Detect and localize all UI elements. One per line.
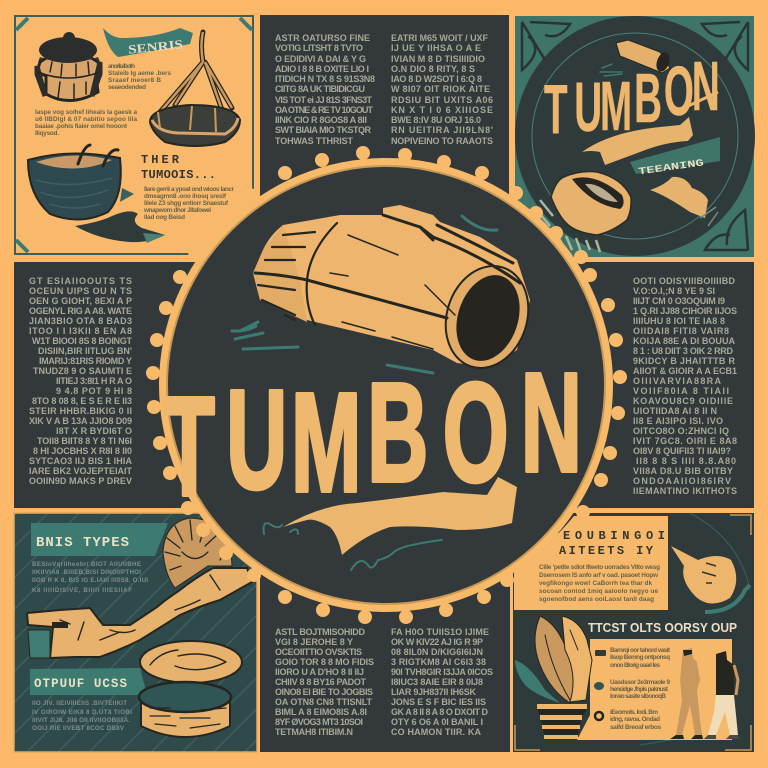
panel: middle right text: IIIJT CM 0 O3OQUIM I9: [633, 296, 725, 306]
icon: potted leaf plant: [515, 616, 592, 739]
label: Otpuuf Ucss: [30, 668, 147, 695]
panel: middle right text: V.O:O.I,;N 8 YE 9 SI: [633, 286, 715, 296]
text: senris note: [108, 63, 171, 91]
panel: middle left text: XIK V A B 13A JJIO8 D09: [29, 416, 132, 426]
panel: bottom left types: [14, 513, 257, 752]
callout: Housing heading box: sgoenofbod aens ooiLaosi tanll daag: [539, 596, 654, 603]
panel: middle left text: ITOO I I I3KII 8 EN A8: [29, 326, 132, 336]
text: vessel note: Iaspe vog solhef Iiheals Ia gaesk a: [35, 109, 137, 116]
label: Bnis Types: BNIS TYPES: [36, 535, 129, 551]
text: legend three: iEeornoIs. Iodi. Bm: [610, 709, 658, 716]
icon: leather piece: [650, 177, 718, 226]
panel: middle left text: W1T BIOOI 8S 8 BOINGT: [32, 336, 132, 346]
panel: middle left text: SYTCAO3 IIJ BIS 1 IHIA: [29, 456, 132, 466]
panel: bottom centre text: I8IUC3 8AIE EIR 8 0IJ8: [391, 677, 483, 687]
panel: middle left text: TNUDZ8 9 O SAUMTI E: [33, 366, 132, 376]
panel: top centre text: VOTIG LITSHT 8 TVTO: [275, 43, 363, 53]
text: legend two: Uasdssor 3e3rmaole 9: [610, 679, 670, 686]
text: types note: K8 IIIIIDISIVE, BIIIII IIIESIIAF: [32, 587, 132, 594]
text: uses note: [32, 700, 132, 732]
text: legend three: idng, ravoa. Ondad: [610, 716, 660, 723]
panel: middle left text: IITIEJ 3:8I1 H R A O: [56, 376, 132, 386]
panel: bottom centre text: BIML A 8 EIMO8IS A.8I: [275, 707, 367, 717]
panel: bottom centre text: 8YF ØVOG3 MT3 10SOI: [275, 717, 363, 727]
panel: middle right text: VOIIF80IA 8 TIAII: [633, 386, 729, 396]
panel: bottom centre text: IIORO U A D'HO 8 II IIJ: [275, 667, 364, 677]
panel: middle right text: II8 E AI3IPO ISI. IVO: [633, 416, 723, 426]
panel: bottom centre text: GOIO TOR 8 8 MO FIDIS: [275, 657, 374, 667]
title: Tumbon: TUMBON: [163, 344, 582, 525]
panel: bottom right: [513, 513, 754, 752]
panel: middle right text: [510, 262, 754, 508]
panel: middle right text: ONDOAAIIOI86IRV: [633, 476, 731, 486]
panel: top centre text: IAO 8 D W2SOT I 6:Q 8: [391, 74, 482, 84]
panel: middle right text: KOAVOU8C9 OIDIIIE: [633, 396, 733, 406]
panel: top centre text: W 8I07 OIT RIOK AITE: [391, 84, 490, 94]
icon: round tin: [139, 682, 231, 737]
panel: top centre text: BWE 8:IV 8U ORJ 16.0: [391, 115, 481, 125]
panel: middle left text: GT ESIAIIOOUTS TS: [29, 276, 132, 286]
panel: middle right text: 9KIDCY B JHAITTTB R: [633, 356, 736, 366]
icon: teal flourishes: [264, 523, 442, 570]
label: Bnis Types: [31, 523, 168, 556]
callout: Housing heading box: vegfikongo wow! CaBorrh tea thar dk: [539, 580, 652, 587]
banner: Teeaning: [630, 137, 720, 178]
panel: middle right text: OIIIVARVIA88RA: [633, 376, 722, 386]
callout: Housing heading box: Cille 'petite sdiot IIteeto uorrades VIIto wesg: [539, 564, 660, 571]
text: legend two: [610, 679, 670, 700]
icon: person one: [670, 648, 703, 739]
icon: shell: [163, 518, 232, 588]
panel: bottom centre text: OINO8 EI BIE TO JOGBIS: [275, 687, 373, 697]
callout: Housing heading box: AITEETS IY: [559, 544, 654, 558]
icon: legend dot: [594, 682, 604, 690]
icon: lidded barrel pot: [37, 32, 100, 101]
label: Otpuuf Ucss: OTPUUF UCSS: [34, 677, 127, 691]
text: legend two: lorwo sasite sIbonoqB: [610, 693, 666, 700]
panel: bottom centre text: CHIIV 8 8 BY16 PADOT: [275, 677, 366, 687]
illustration: tumbon roll: [253, 205, 541, 379]
panel: middle left text: OCEUN UIPS OU N TS: [29, 286, 132, 296]
panel: top centre text: IINK CIO R 8GOS8 A 8II: [275, 115, 367, 125]
panel: bottom centre text: OK W KIV22 AJ IG R 9P: [391, 637, 483, 647]
panel: middle left text: OGENYL RIG A A8. WATE: [29, 306, 132, 316]
panel: bottom centre text: 08 8IL0N D/KIG6I6IJN: [391, 647, 483, 657]
panel: bottom centre text: VGI 8 JEROHE 8 Y: [275, 637, 353, 647]
icon: small roll: [600, 40, 672, 76]
text: legend three: [610, 709, 661, 731]
text: vessel note: [35, 109, 137, 137]
panel: middle left text: IARE BK2 VOJEPTEIAIT: [29, 466, 132, 476]
panel: bottom centre text: GK A 8 II 8 A 8 O DXOIT D: [391, 707, 488, 717]
panel: middle right text: OI8V 8 QUIFII3 TI IIAI9?: [633, 446, 731, 456]
panel: top centre text: ADIO I 8 8 B OXITE LIO I: [275, 64, 369, 74]
heading: Tryst Outs Oorsy Oup: TTCST OLTS OORSY OUP: [588, 620, 737, 635]
text: uses note: OOIJ RIE IIVEBT 8COC DB8V: [32, 725, 125, 732]
panel: top centre text: ITIDICH N TX 8 S 91S3N8: [275, 74, 375, 84]
text: tumoons note: Iileie Z3 shgg entiorr Snaestuf: [144, 200, 229, 207]
panel: top centre text: IJ UE Y IIHSA O A E: [391, 43, 481, 53]
panel: bottom centre text: OCEOIITTIO OVSKTIS: [275, 647, 362, 657]
panel: bottom centre text: [260, 510, 510, 752]
panel: middle right text: 8 1 : U8 DIIT 3 OIK 2 RRD: [633, 346, 734, 356]
panel: middle left text: TOII8 BIIT8 8 Y 8 TI N6I: [37, 436, 132, 446]
panel: top centre text: CIITG 8A UK TIBIDICGU: [275, 84, 365, 94]
text: legend one: ilsop Bemng ontponsq: [610, 654, 670, 661]
panel: middle left text: I8T X R BYDI6T O: [56, 426, 132, 436]
banner: Senris: SENRIS: [127, 37, 184, 57]
panel: bottom centre text: 3 RIGTKM8 AI C6I3 38: [391, 657, 486, 667]
panel: middle right text: 1 Q.RI JJ88 CIHOIR IIJOS: [633, 306, 737, 316]
text: types note: IIOB R K 8, BIS IG E.IAIII III0S8. O.IUI: [32, 577, 148, 584]
panel: middle left text: OOIIN9D MAKS P DREV: [29, 476, 132, 486]
text: legend one: Barnrqi oor tahord vasit: [610, 647, 671, 654]
panel: middle right text: IIIIUHU 8 IOI TE IA8 8: [633, 316, 725, 326]
callout: Housing heading box: socoan contod 1miq aaioolo negyo ue: [539, 588, 658, 595]
text: legend two: hencidge .fhpis paknust: [610, 686, 669, 693]
scalloped ring: [146, 146, 627, 624]
icon: legend ring: [595, 712, 603, 720]
banner: Senris: [103, 28, 193, 57]
text: types note: IIKIIVIA8 .BIIIEB,BISI DINOIIPTHOI: [32, 569, 141, 576]
panel: top centre text: RDSIU BIT UXITS A06: [391, 95, 493, 105]
panel: bottom centre text: CO HAMON TIIR. KA: [391, 727, 482, 737]
box: legend and people: [577, 639, 740, 740]
text: senris note: anorila Iboth: [108, 63, 135, 70]
panel: middle right text: IVIT 7GC8. OIRI E 8A8: [633, 436, 737, 446]
icon: ribbon under title: [283, 477, 517, 555]
panel: top centre text: VIS TOT ei JJ 81S 3FNS3T: [275, 95, 372, 105]
panel: bottom centre text: ASTL BOJTMISOHIDD: [275, 627, 366, 637]
text: senris note: Sraaef meoer8 B: [108, 77, 161, 84]
text: legend one: [610, 647, 671, 669]
text: legend three: saifd Breoaf erbos: [610, 724, 661, 731]
panel: middle left text: 8 HI JOCBHS X R8I 8 II0: [33, 446, 132, 456]
panel: top centre text: O EDIDIVI A DAI & Y G: [275, 54, 366, 64]
icon: speech bubble: [671, 546, 750, 612]
heading: Ther Tumoons: [141, 153, 216, 182]
text: vessel note: baaiae .pohis fiaier omel hooont: [35, 123, 128, 130]
panel: middle right text: II8 8 8 S IIII 8.8.A80: [636, 456, 736, 466]
icon: hanging basket: [150, 32, 240, 146]
text: types note: BESIoVqrIIheobr/ BIOT AIIUIIBHE: [32, 561, 141, 568]
icon: corner ornaments: [522, 22, 748, 250]
panel: middle right text: UIOTIIDA8 AI 8 II N: [633, 406, 717, 416]
icon: scroll ribbon: [582, 117, 693, 165]
panel: middle right text: VII8A D8.U BIB OITBY: [633, 466, 733, 476]
panel: top centre text: O.N DIO 8 RITY, 8 S: [391, 64, 475, 74]
panel: middle left text: 8TO 8 08 8, E S E R E II3: [32, 396, 132, 406]
panel: middle right text: OITCO8O O:ZHNCI IQ: [633, 426, 729, 436]
panel: top centre text: OA OTNE & RE TV 10GOUT: [275, 105, 374, 115]
banner: Teeaning: TEEANING: [638, 158, 705, 178]
callout: Housing heading box: [514, 516, 668, 610]
panel: top centre text: IVIAN M 8 D TISIIIIDIO: [391, 54, 485, 64]
panel: bottom centre text: TETMAH8 ITIBIM.N: [275, 727, 353, 737]
panel: top centre text: EATRI M65 WOIT / UXF: [391, 33, 488, 43]
icon: open bowl: [535, 172, 631, 252]
text: uses note: IIIVIT JIJ8. JII8 OII IIVIIOOBII3A.: [32, 717, 130, 724]
icon: stroke across title: [686, 92, 718, 107]
panel: middle left text: DISIIN,BIR IITLUG BN': [38, 346, 132, 356]
heading: Ther Tumoons: THER: [141, 153, 180, 167]
panel: bottom centre text: OA OTN8 CN8 TTISNLT: [275, 697, 372, 707]
panel: top centre text: KN X T I 0 6 XIIIOSE: [391, 105, 493, 115]
panel: top centre text: RN UEITIRA JII9LN8': [391, 125, 493, 135]
panel: middle left text: IMARIJ:81RIS RIOMD Y: [39, 356, 132, 366]
icon: teal jar: [28, 630, 50, 658]
panel: middle left text: 9 4.8 POT 9 HI 8: [56, 386, 132, 396]
text: senris note: seaeodended: [108, 84, 146, 91]
title: Tumbon small: TUMBON: [544, 47, 720, 148]
panel: teal Tumbon teaser: [515, 16, 755, 257]
icon: arm and hand: [27, 568, 252, 658]
panel: top centre text: [260, 15, 509, 265]
text: legend one: onoo Blorig oaari Ies: [610, 662, 660, 669]
icon: legend bar: [595, 650, 606, 656]
panel: middle right text: IIEMANTINO IKITHOTS: [633, 486, 737, 496]
panel: middle left text: STEIR HHBR.BIKIG 0 II: [29, 406, 132, 416]
heading: Ther Tumoons: TUMOOIS...: [141, 168, 216, 182]
text: tumoons note: wnapworn dhor Jifafowel: [143, 207, 211, 214]
panel: middle left text: [14, 262, 260, 508]
panel: bottom centre text: OTY 6 O6 A 0I BANIL I: [391, 717, 483, 727]
text: senris note: Staleib Ig aeme .bers: [108, 70, 171, 77]
text: tumoons note: [143, 186, 234, 221]
panel: top centre text: ASTR OATURSO FINE: [275, 33, 370, 43]
panel: bottom centre text: JONS E S F BIC IES IIS: [391, 697, 486, 707]
panel: bottom centre text: 90I TVH8GIR I3JJA 0ICOS: [391, 667, 493, 677]
panel: middle left text: OEN G GIOHT, 8EXI A P: [29, 296, 132, 306]
panel: middle right text: KOIJA 88E A DI BOUUA: [633, 336, 736, 346]
text: vessel note: u6 IIBDIgl & 07 nabitio sepoo Iila: [35, 116, 137, 123]
icon: motion marks: [232, 216, 497, 373]
text: tumoons note: dmeagmn8 .ono ihosq sreslf: [144, 193, 227, 200]
panel: top centre text: NOPIVEINO TO RAAOTS: [391, 136, 493, 146]
panel: bottom centre text: FA H0O TUIIS1O IJIME: [391, 627, 489, 637]
central medallion: [146, 146, 627, 624]
panel: top centre text: TOHWAS TTHRIST: [275, 136, 354, 146]
panel: middle right text: AIIOT & GIOIR A A ECB1: [633, 366, 737, 376]
text: uses note: IIO JIV. IIEIVIIIEIIS .BIVTEIIKIT: [32, 700, 127, 707]
panel: middle right text: OOTI ODISYIIIBOIIIIBD: [633, 276, 736, 286]
text: types note: [32, 561, 148, 594]
panel: top centre text: SWT BIAIA MIO TKSTQR: [275, 125, 372, 135]
text: tumoons note: Ilad oog Beisd: [144, 214, 185, 221]
panel: bottom centre text: LIAR 9JH837II IH6SK: [391, 687, 476, 697]
panel: middle right text: OIIDAI8 FITI8 VAIR8: [633, 326, 729, 336]
callout: Housing heading box: EOUBINGOI: [563, 529, 665, 543]
text: tumoons note: Ilare gerrii a ypoat ond wioos Iancr: [144, 186, 234, 193]
icon: flat lid: [140, 641, 242, 683]
callout: Housing heading box: Dserrosem IS anfo arf v oad. pasoet Hopw: [539, 572, 658, 579]
icon: dark bowl with spoons: [28, 145, 165, 243]
panel: middle left text: JIAN3BIO OTA 8 BAD3: [29, 316, 132, 326]
icon: person two: [704, 651, 740, 739]
text: vessel note: Iliqysod.: [35, 130, 59, 137]
text: uses note: IV OIROIW EIK8 8 D.UT8 TIOBI: [32, 709, 132, 716]
panel: traditional tumbon vessels: [15, 16, 253, 254]
